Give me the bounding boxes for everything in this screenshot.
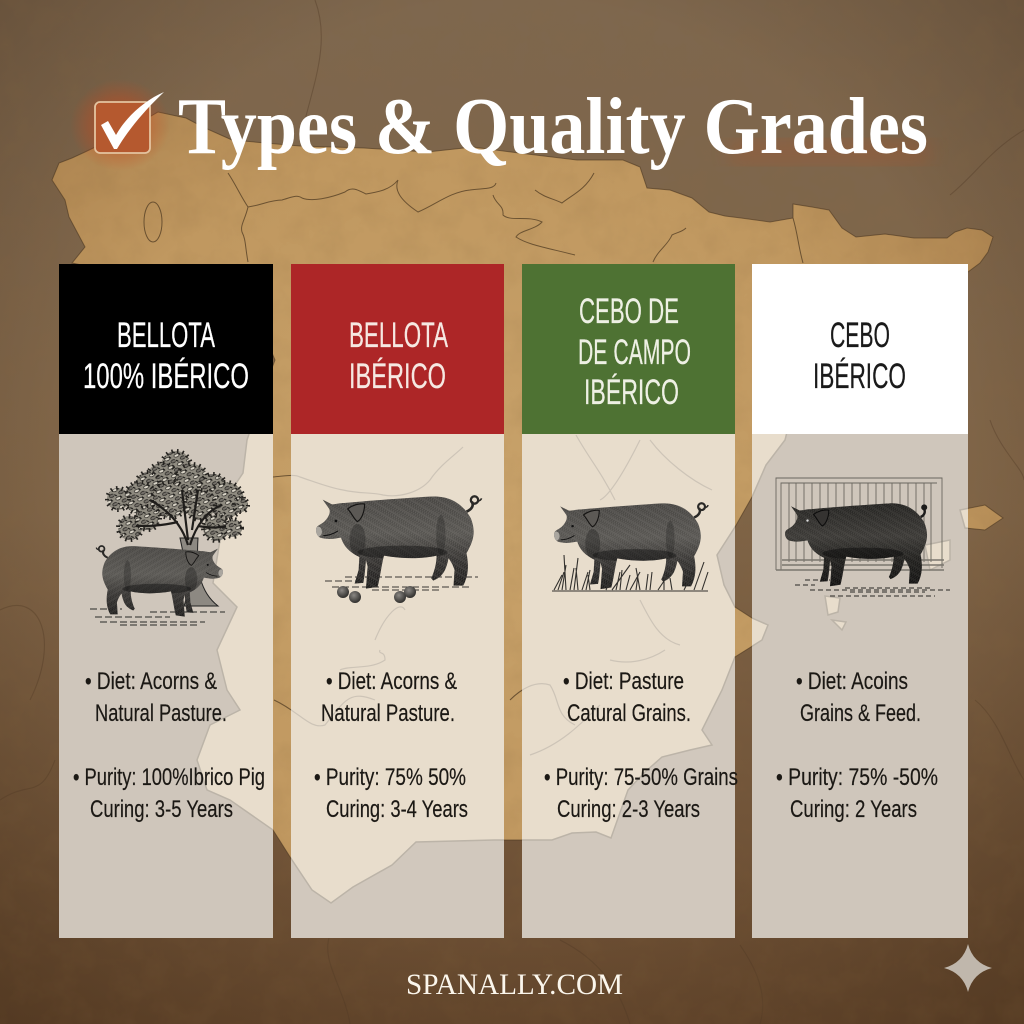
text: Cebo de Campo details: Curing: 2-3 Years xyxy=(557,796,700,823)
text: Cebo de Campo details xyxy=(544,668,738,823)
header: Bellota 100% Ibérico: 100% IBÉRICO xyxy=(83,357,249,396)
header: Cebo Ibérico xyxy=(752,264,968,434)
text: Cebo details: • Purity: 75% -50% xyxy=(776,764,938,791)
text: Bellota 100% details: Curing: 3-5 Years xyxy=(90,796,233,823)
header: Cebo Ibérico: CEBO xyxy=(830,316,890,355)
text: Bellota 100% details xyxy=(73,668,265,823)
text: Cebo de Campo details: Catural Grains. xyxy=(567,700,691,727)
text: Cebo details: • Diet: Acoins xyxy=(796,668,908,695)
header: Cebo de Campo Ibérico: CEBO DE xyxy=(579,292,679,331)
text: Cebo de Campo details: • Diet: Pasture xyxy=(563,668,684,695)
header: Cebo de Campo Ibérico xyxy=(522,264,735,434)
header: Bellota 100% Ibérico: BELLOTA xyxy=(117,316,215,355)
text: Cebo details: Grains & Feed. xyxy=(800,700,921,727)
text: Bellota details: Curing: 3-4 Years xyxy=(326,796,468,823)
header: Bellota Ibérico xyxy=(291,264,504,434)
text: Bellota details xyxy=(314,668,468,823)
icon: four-point star xyxy=(944,944,992,992)
text: Bellota details: • Purity: 75% 50% xyxy=(314,764,466,791)
text: Bellota details: Natural Pasture. xyxy=(321,700,455,727)
illustration: pig in pen xyxy=(776,478,950,596)
panel: Bellota 100% Ibérico xyxy=(59,264,273,823)
header: Cebo de Campo Ibérico: DE CAMPO xyxy=(578,333,691,372)
panel: Cebo Ibérico xyxy=(752,264,968,823)
title text: Types & Quality Grades xyxy=(178,83,928,171)
footer website: SPANALLY.COM xyxy=(406,968,623,1001)
header: Bellota Ibérico: IBÉRICO xyxy=(349,357,446,396)
illustration: pig on grass xyxy=(552,502,709,592)
text: Bellota 100% details: • Purity: 100%Ibrico Pig xyxy=(73,764,265,791)
text: Cebo de Campo details: • Purity: 75-50% Grains xyxy=(544,764,738,791)
header: Cebo de Campo Ibérico: IBÉRICO xyxy=(584,373,679,412)
illustration: pig with acorns xyxy=(315,495,482,603)
header: Bellota 100% Ibérico xyxy=(59,264,273,434)
text: Bellota 100% details: Natural Pasture. xyxy=(95,700,227,727)
text: Bellota details: • Diet: Acorns & xyxy=(326,668,457,695)
illustration: pig under oak tree xyxy=(90,451,248,625)
header: Cebo Ibérico: IBÉRICO xyxy=(813,357,906,396)
panel: Bellota Ibérico xyxy=(291,264,504,823)
text: Bellota 100% details: • Diet: Acorns & xyxy=(85,668,217,695)
title xyxy=(70,79,930,171)
map of Spain xyxy=(52,112,1003,903)
panel: Cebo de Campo Ibérico xyxy=(522,264,738,823)
text: Cebo details xyxy=(776,668,938,823)
pale panel bodies with map showing through xyxy=(59,434,968,938)
icon: checkbox with tick xyxy=(95,92,164,153)
text: Cebo details: Curing: 2 Years xyxy=(790,796,917,823)
header: Bellota Ibérico: BELLOTA xyxy=(349,316,448,355)
